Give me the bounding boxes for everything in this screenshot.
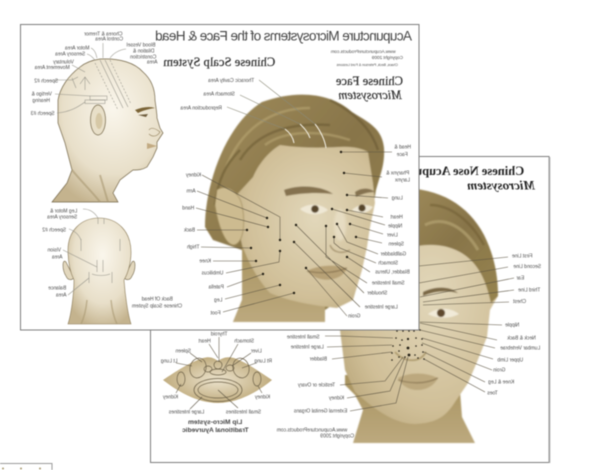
face labels, left: Knee — [199, 258, 211, 264]
face labels, left: Back — [183, 227, 195, 233]
nose microsystem heading: Chinese Nose Acupuncture — [380, 164, 524, 178]
nose point labels, left: Kidney — [328, 395, 344, 401]
web and copyright block: Copyright 2009 — [371, 55, 403, 60]
nose point labels, right — [487, 253, 541, 396]
face labels, right: Gallbladder — [380, 251, 406, 257]
face labels, right: Face — [396, 152, 408, 158]
face microsystem heading — [336, 74, 403, 102]
lip diagram labels: Stomach — [234, 338, 254, 344]
lip diagram labels: Liver — [251, 348, 262, 354]
side view labels: Speech #3 — [31, 111, 55, 117]
side view labels: Speech #2 — [34, 78, 58, 84]
hair strands — [215, 100, 378, 205]
lip diagram labels: Large Intestines — [168, 409, 204, 415]
portrait: woman facing forward — [340, 188, 498, 443]
scalp treatment lines — [72, 60, 131, 110]
face acupoint dots — [246, 151, 357, 294]
side view labels: Voluntary — [53, 59, 74, 65]
lip diagram labels: Kidney — [162, 394, 178, 400]
face labels, right: Head & — [394, 144, 411, 150]
back of head labels: Chinese Scalp System — [132, 303, 182, 309]
face labels, right: Large Intestine — [364, 304, 398, 310]
face labels, top: Stomach Area — [203, 91, 235, 97]
side view labels: Movement Area — [34, 65, 70, 71]
side view labels: Sensory Area — [55, 51, 85, 57]
back of head labels: Area — [56, 292, 66, 298]
copyright text: www.AcupunctureProducts.com — [277, 427, 347, 433]
lip diagram labels: Spleen — [175, 348, 191, 354]
face labels, left: Kidney — [185, 172, 201, 178]
web and copyright block: www.AcupunctureProducts.com — [331, 49, 396, 54]
nose point labels, right: Third Line — [518, 287, 540, 293]
back of head labels: Sensory Area — [47, 214, 77, 220]
nose point labels, left: Testicle or Ovary — [297, 382, 335, 388]
nose acupoint dots — [391, 329, 425, 361]
side view labels: Vertigo & — [31, 91, 52, 97]
side view labels: Control Area — [95, 36, 123, 42]
face labels, left: Thigh — [187, 244, 199, 250]
face labels, left: Leg — [214, 297, 222, 303]
nose microsystem heading — [380, 164, 536, 192]
panel: Chinese nose acupuncture microsystem — [150, 156, 550, 463]
nose microsystem heading: Microsystem — [467, 177, 536, 192]
back of head labels — [42, 208, 182, 309]
lip diagram caption: Traditional Ayurvedic — [182, 427, 249, 434]
portrait: woman in three-quarter view — [205, 95, 384, 322]
face labels, right: Groin — [348, 313, 360, 319]
face labels, left — [182, 172, 224, 316]
nose point labels, right: Toes — [487, 390, 498, 396]
nose point labels, right: Chest — [512, 299, 526, 305]
panel: face and head microsystems — [20, 24, 419, 330]
back of head labels: Balance — [48, 285, 66, 291]
main title: Acupuncture Microsystems of the Face & Head — [155, 29, 412, 44]
scalp system heading: Chinese Scalp System — [163, 55, 275, 69]
illustration: back of head — [63, 209, 135, 324]
face labels, top: Thoracic Cavity Area — [208, 78, 254, 84]
back of head labels: Area — [52, 254, 62, 260]
back of head labels: Back Of Head — [141, 296, 173, 302]
side view labels: Hearing — [32, 98, 50, 104]
nose point labels, left: External Genital Organs — [293, 408, 347, 414]
back of head labels: Speech #2 — [42, 227, 66, 233]
lip diagram labels — [161, 331, 272, 415]
face labels, right: Nipple — [388, 223, 402, 229]
face labels, right: Spleen — [388, 241, 404, 247]
lip diagram caption: Lip Micro-system — [188, 419, 242, 426]
lip microsystem diagram — [163, 337, 272, 409]
face microsystem heading: Chinese Face — [336, 74, 403, 88]
nose point leader lines — [325, 257, 514, 411]
nose point labels, right: Second Line — [513, 264, 541, 270]
ear — [215, 188, 244, 245]
nose point labels, right: Knee & Leg — [488, 379, 514, 385]
lip diagram labels: Small Intestines — [225, 409, 261, 415]
face labels, right: Lung — [391, 195, 403, 201]
scalp leader lines — [55, 43, 126, 113]
lip diagram labels: Kidney — [254, 394, 270, 400]
nose point labels, right: Groin — [493, 367, 505, 373]
nose point labels, right: Lumbar Vertebrae — [500, 345, 540, 351]
face microsystem heading: Microsystem — [338, 88, 403, 102]
face labels, top — [180, 78, 254, 111]
face labels, right: Pharynx & — [385, 170, 409, 176]
white needle arcs on hair — [285, 124, 326, 148]
back of head labels: Leg Motor & — [49, 208, 77, 214]
web and copyright block: Chaos, Beck, Peterson & Ford Lessons — [336, 63, 398, 67]
face labels, left: Patella — [208, 284, 224, 290]
nose point labels, left: Large Intestine — [290, 344, 324, 350]
face labels, right: Larynx — [394, 177, 410, 183]
face labels, left: Hand — [182, 205, 194, 211]
back scalp treatment lines — [63, 209, 120, 295]
illustration: side view of head — [52, 43, 163, 202]
lip diagram labels: Rt Lung — [254, 358, 272, 364]
side view labels: Constriction — [130, 54, 156, 60]
nose point labels, right: Nipple — [505, 322, 519, 328]
face labels, top: Reproduction Area — [180, 105, 222, 111]
corner of a third sheet — [0, 464, 52, 470]
nose point labels, left — [287, 334, 347, 414]
lip diagram labels: Thyroid — [211, 331, 228, 337]
nose point labels, left: Small Intestine — [287, 334, 320, 340]
face labels, right: Stomach — [378, 260, 398, 266]
side view labels: Chorea & Tremor — [84, 31, 123, 37]
face labels, right: Bladder, Uterus — [375, 269, 410, 275]
side view labels: Area — [147, 59, 157, 65]
face labels, right: Liver — [387, 232, 398, 238]
side view labels: Motor Area — [65, 45, 89, 51]
side view labels — [31, 31, 157, 117]
face labels, right: Shoulder — [367, 290, 387, 296]
face labels, left: Foot — [210, 310, 221, 316]
lip diagram labels: Heart — [198, 338, 211, 344]
lip diagram caption — [182, 419, 249, 434]
nose point labels, right: Neck & Back — [507, 335, 536, 341]
lip diagram labels: Lt Lung — [161, 358, 178, 364]
side view labels: Blood Vessel — [127, 42, 155, 48]
face labels, left: Arm — [186, 188, 196, 194]
face leader lines — [196, 80, 392, 316]
face labels, right — [348, 144, 411, 319]
copyright text — [277, 427, 354, 439]
side view labels: Dilation & — [132, 48, 154, 54]
nose point labels, right: Ear — [516, 275, 524, 281]
face labels, right: Small Intestine — [372, 280, 405, 286]
nose point labels, left: Bladder — [309, 356, 327, 362]
nose point labels, right: Upper Limb — [497, 357, 523, 363]
web and copyright block — [331, 49, 403, 67]
face labels, left: Umbilicus — [201, 270, 223, 276]
back of head labels: Vision — [47, 247, 61, 253]
face labels, right: Heart — [390, 214, 403, 220]
copyright text: Copyright 2009 — [320, 433, 354, 439]
nose point labels, right: First Line — [512, 253, 532, 259]
